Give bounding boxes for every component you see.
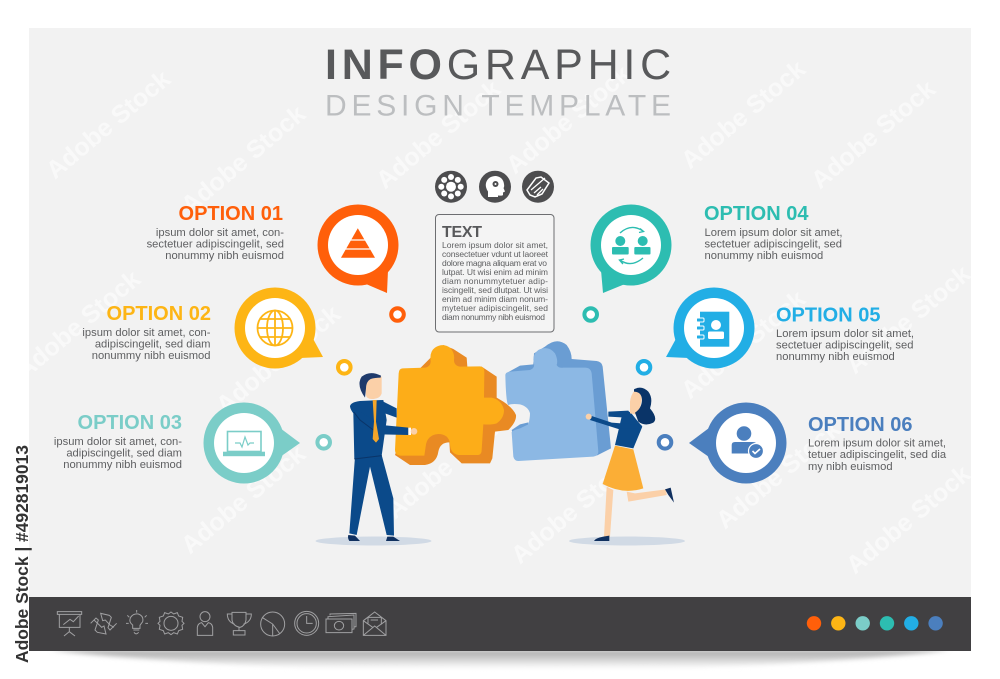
ground shadows	[316, 536, 685, 546]
option 04 text: nonummy nibh euismod	[704, 250, 823, 262]
icon: opposing arrows	[91, 613, 117, 634]
icon: envelope	[363, 612, 386, 635]
icon: banknotes	[326, 613, 356, 633]
option 04 text	[704, 203, 843, 262]
text panel	[436, 214, 554, 332]
title	[325, 41, 676, 122]
option 03 text: nonummy nibh euismod	[63, 459, 182, 471]
option 02 text: nonummy nibh euismod	[92, 350, 210, 362]
puzzle piece: orange	[395, 345, 516, 465]
stock watermark: Adobe Stock	[501, 60, 636, 180]
option 06 text	[808, 414, 947, 473]
stock watermark: Adobe Stock	[381, 405, 516, 525]
option 05 text: Lorem ipsum dolor sit amet,	[776, 328, 914, 340]
stock watermark: Adobe Stock	[676, 55, 811, 175]
stock watermark	[11, 55, 976, 580]
option 05 ring	[638, 361, 650, 374]
icon: light bulb	[126, 610, 148, 634]
stock watermark: Adobe Stock	[211, 300, 346, 420]
option 02 text	[82, 303, 211, 362]
option 04 text: OPTION 04	[704, 203, 809, 225]
text panel: TEXT	[442, 224, 482, 241]
option 02 text: ipsum dolor sit amet, con-	[82, 327, 211, 339]
stock watermark: Adobe Stock	[676, 285, 811, 405]
option 01 text: nonummy nibh euismod	[165, 250, 284, 262]
icon: trophy	[227, 612, 251, 635]
icon: person	[197, 612, 213, 635]
option 03 text: ipsum dolor sit amet, con-	[54, 436, 182, 448]
central illustration: two people joining puzzle pieces	[316, 341, 685, 546]
option 03 text: adipiscingelit, sed diam	[66, 448, 182, 460]
text panel: consectetuer vdunt ut laoreet	[442, 249, 549, 259]
icon: presentation easel	[57, 612, 82, 636]
option 01 text: ipsum dolor sit amet, con-	[156, 227, 284, 239]
text panel: diam nonummytetuer adip-	[442, 276, 548, 286]
option 02 text: adipiscingelit, sed diam	[95, 338, 210, 350]
option 06 text: OPTION 06	[808, 414, 912, 436]
option 06 text: my nibh euismod	[808, 461, 893, 473]
option 01 text: OPTION 01	[179, 203, 283, 225]
text panel: mytetuer adipiscingelit, sed	[442, 303, 548, 313]
option 04 text: sectetuer adipiscingelit, sed	[704, 238, 842, 250]
colour legend dots	[807, 616, 943, 630]
icon: clock	[295, 611, 319, 635]
title: DESIGN TEMPLATE	[325, 90, 671, 122]
option 05 text: nonummy nibh euismod	[776, 351, 895, 363]
option 05 text	[776, 304, 914, 363]
stock watermark: Adobe Stock	[711, 415, 846, 535]
option 06 ring	[659, 436, 671, 449]
option 06 bubble	[689, 402, 786, 484]
woman figure	[586, 388, 674, 541]
option 02 bubble	[234, 288, 323, 368]
option 05 bubble	[666, 288, 754, 368]
icon: gear	[158, 612, 184, 635]
man figure	[348, 373, 417, 541]
stock watermark: Adobe Stock	[371, 75, 506, 195]
option 02 text: OPTION 02	[107, 303, 211, 325]
top icon: head with gear	[479, 171, 511, 203]
option 01 ring	[391, 308, 404, 321]
option 03 text	[54, 412, 182, 471]
stock watermark: Adobe Stock	[506, 450, 641, 570]
stock id label: Adobe Stock | #492819013	[12, 445, 32, 663]
text panel: dolore magna aliquam erat vo	[442, 258, 547, 268]
text panel: diam nonummy nibh euismod	[442, 312, 545, 322]
option 04 ring	[584, 308, 597, 321]
stock watermark: Adobe Stock	[806, 75, 941, 195]
text panel: lutpat. Ut wisi enim ad minim	[442, 267, 548, 277]
title: INFOGRAPHIC	[325, 41, 676, 89]
option 02 ring	[338, 361, 351, 374]
option 06 text: Lorem ipsum dolor sit amet,	[808, 438, 946, 450]
option 03 bubble	[204, 402, 300, 484]
stock watermark: Adobe Stock	[841, 260, 976, 380]
stock watermark: Adobe Stock	[176, 440, 311, 560]
stock watermark: Adobe Stock	[11, 265, 146, 385]
option 04 bubble	[590, 204, 672, 293]
footer icon row	[57, 610, 386, 636]
option 06 text: tetuer adipiscingelit, sed dia	[808, 449, 947, 461]
option 05 text: OPTION 05	[776, 304, 880, 326]
stock watermark: Adobe Stock	[841, 460, 976, 580]
text panel: Lorem ipsum dolor sit amet,	[442, 240, 548, 250]
footer band	[29, 597, 971, 651]
top icon: network wheel	[435, 171, 467, 203]
option 03 ring	[317, 436, 330, 449]
option 01 text	[147, 203, 284, 262]
option 04 text: Lorem ipsum dolor sit amet,	[704, 227, 843, 239]
card background	[29, 28, 971, 598]
option 01 bubble	[318, 204, 398, 293]
top icon: handshake	[522, 171, 554, 203]
stock watermark: Adobe Stock	[176, 100, 311, 220]
option 05 text: sectetuer adipiscingelit, sed	[776, 340, 913, 352]
option 01 text: sectetuer adipiscingelit, sed	[147, 238, 284, 250]
text panel: iscingelit, sed dlutpat. Ut wisi	[442, 285, 548, 295]
text panel: enim ad minim diam nonum-	[442, 294, 548, 304]
stock watermark: Adobe Stock	[41, 65, 176, 185]
band drop shadow	[50, 650, 950, 672]
puzzle piece: blue	[505, 341, 611, 461]
option 03 text: OPTION 03	[78, 412, 182, 434]
icon: pie chart	[261, 612, 285, 636]
